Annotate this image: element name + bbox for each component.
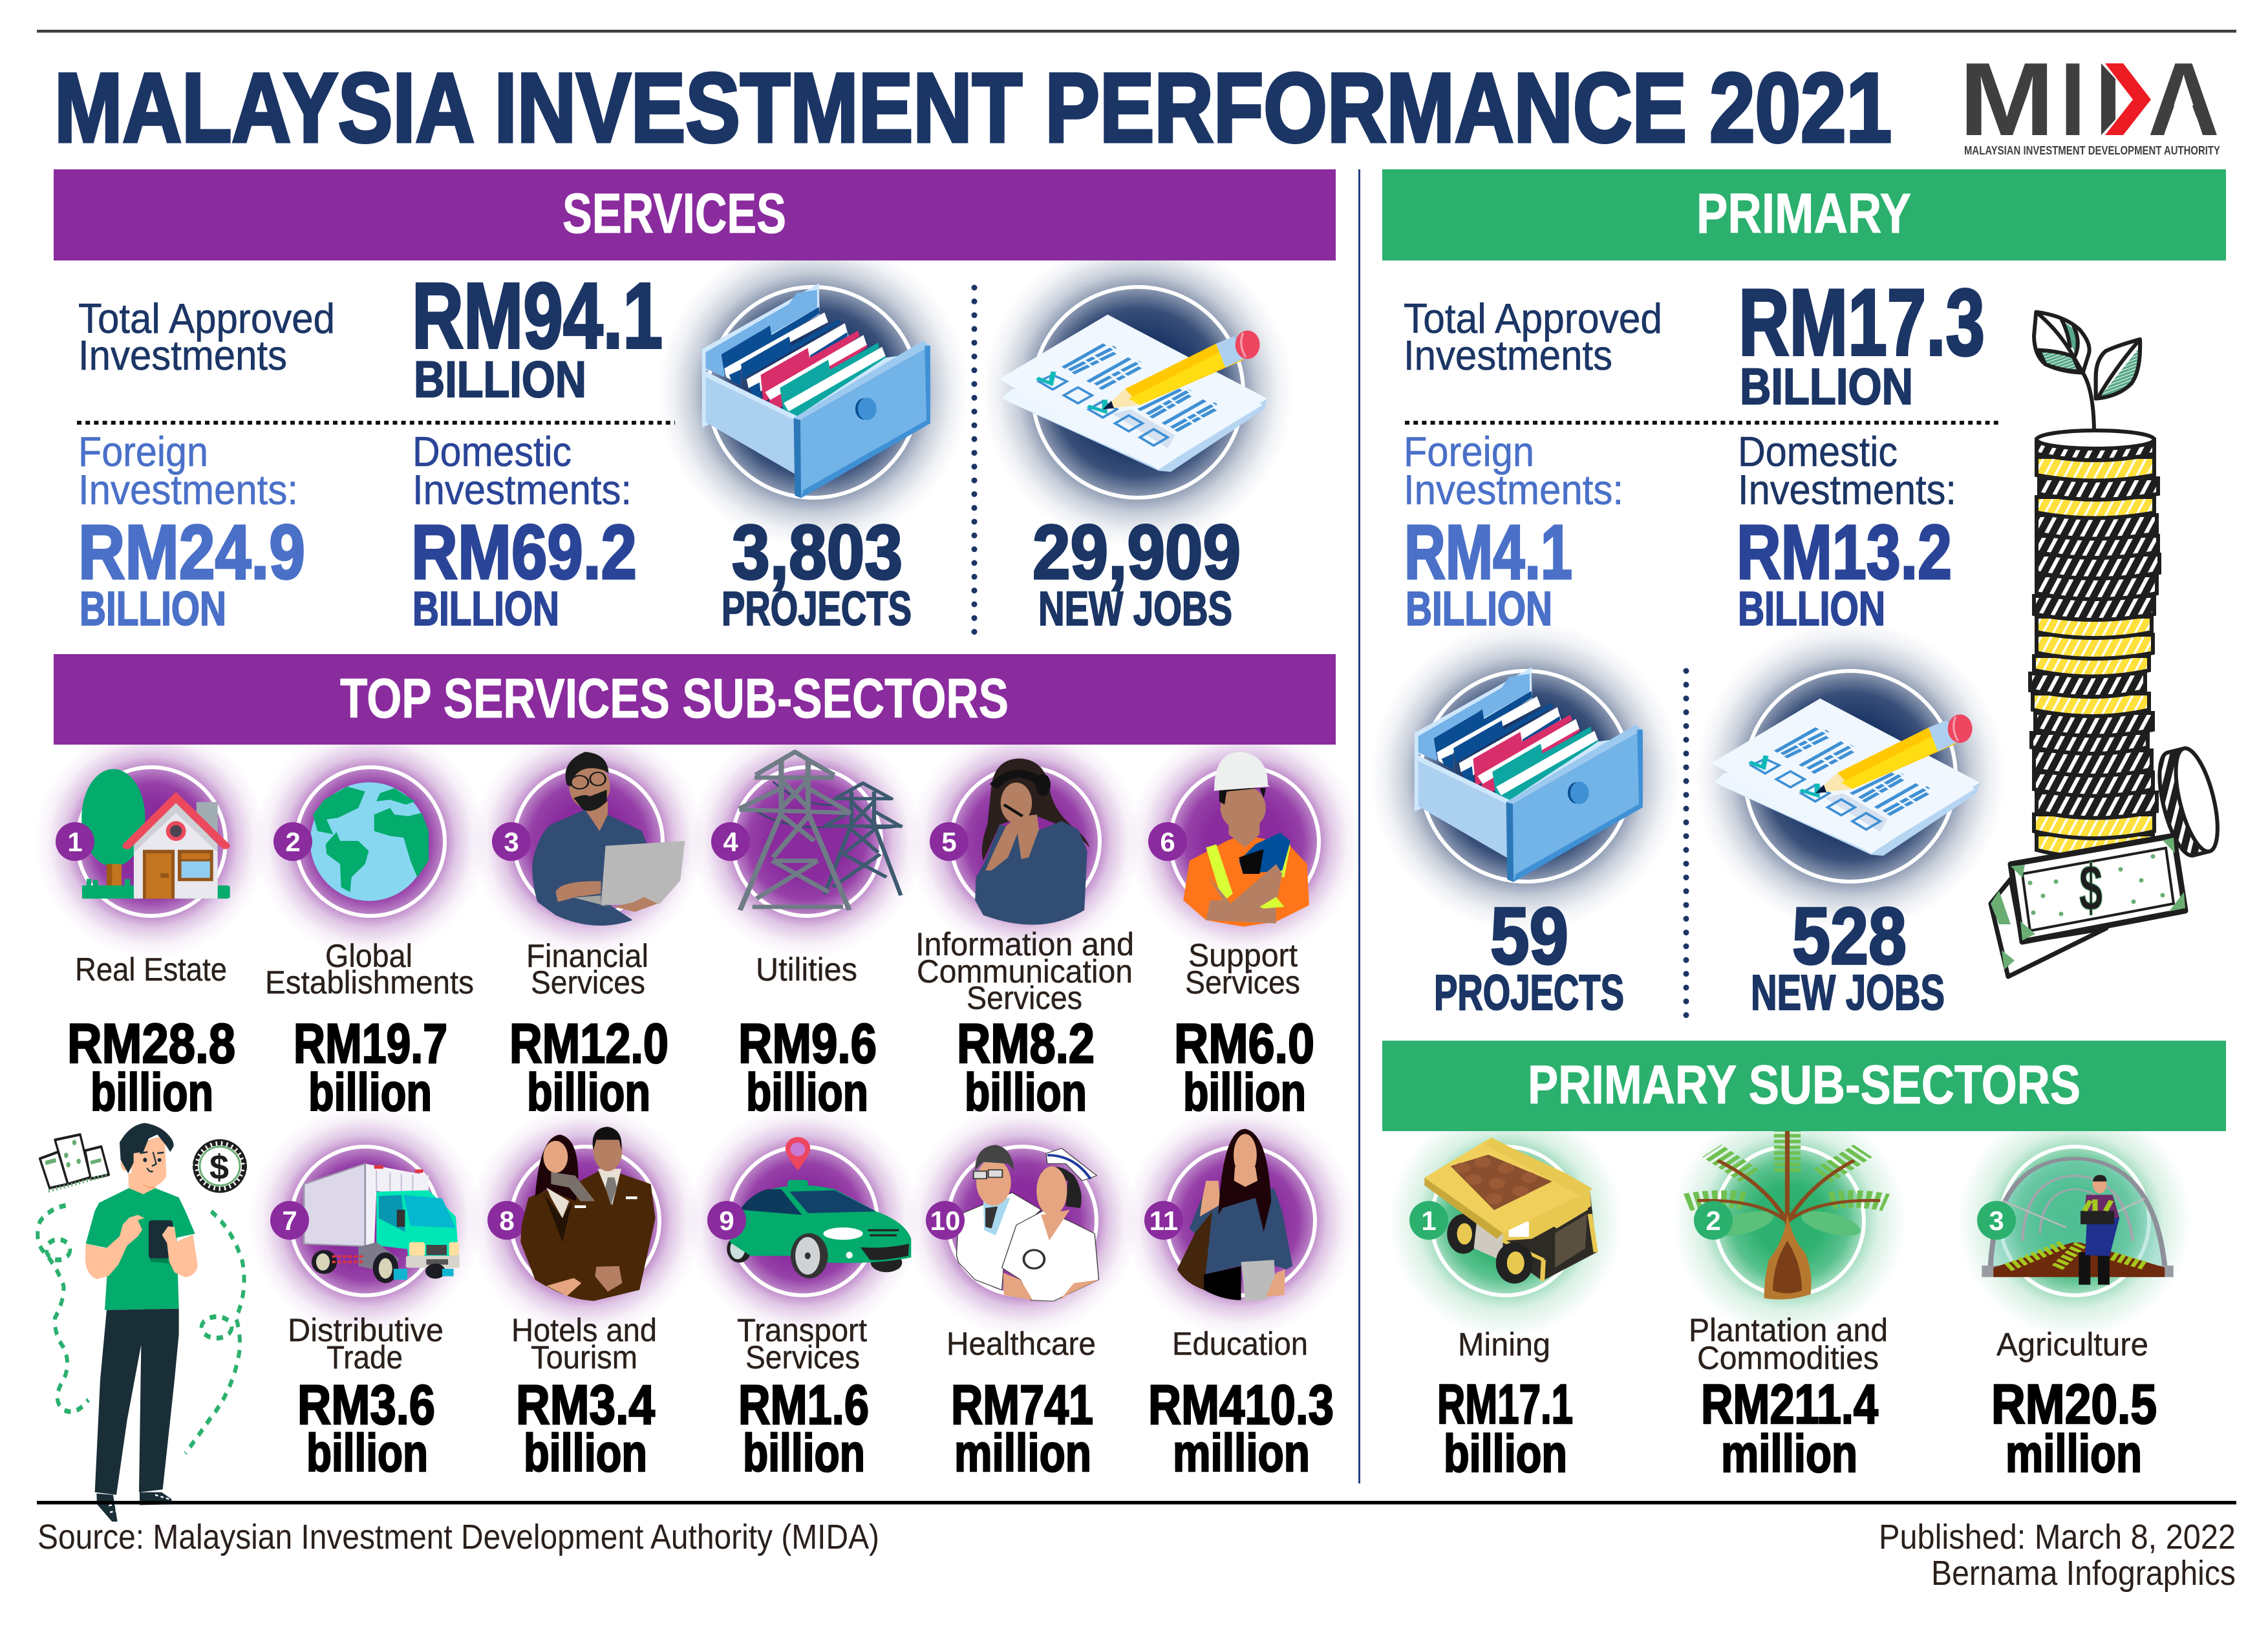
label and value: agriculture: million [2006, 1425, 2142, 1483]
icon: dollar coin [194, 1140, 246, 1192]
badge 6: 6 [1160, 827, 1175, 857]
primary: projects: 59 [1490, 892, 1568, 981]
icon: construction worker [1183, 752, 1309, 927]
label and value: agriculture: Agriculture [1996, 1326, 2148, 1363]
label and value: transport services [737, 1312, 869, 1483]
primary: projects [1434, 892, 1624, 1021]
label and value: hotels and tourism: Hotels and [511, 1312, 657, 1348]
label and value: distributive trade: Trade [326, 1339, 403, 1375]
logo: MIDA: I [2060, 41, 2086, 158]
heading: services: SERVICES [562, 182, 786, 245]
services: total value: RM94.1 [412, 264, 663, 368]
label and value: education: million [1173, 1424, 1310, 1483]
label and value: support services: billion [1183, 1063, 1306, 1122]
sub-sector 10: healthcare [906, 1105, 1139, 1337]
stacked coin bands [2030, 430, 2159, 857]
label and value: plantation and commodities [1689, 1312, 1888, 1483]
badge 9 [707, 1201, 746, 1240]
label and value: healthcare: Healthcare [947, 1326, 1096, 1362]
icon: delivery truck [304, 1163, 460, 1283]
label and value: global establishments: Global [325, 938, 412, 974]
badge 4 [711, 822, 750, 861]
seedling [2034, 312, 2140, 431]
label and value: utilities: RM9.6 [738, 1013, 877, 1075]
badge 9: 9 [719, 1205, 734, 1236]
primary sub-sector 3: agriculture [1958, 1105, 2191, 1337]
label and value: information and communication services [915, 926, 1134, 1122]
buildings [40, 1134, 109, 1188]
label and value: financial services: RM12.0 [509, 1013, 669, 1075]
label and value: global establishments [265, 938, 474, 1122]
primary: projects: PROJECTS [1434, 965, 1624, 1021]
badge 5 [930, 822, 968, 861]
sub-sector 5: information and communication services [909, 725, 1142, 958]
badge 3 [1977, 1201, 2016, 1240]
icon: man with laptop [532, 752, 685, 926]
badge 1 [1409, 1201, 1448, 1240]
label and value: plantation and commodities: Plantation and [1689, 1312, 1888, 1348]
label and value: support services: Services [1185, 964, 1300, 1001]
sub-sector 7: distributive trade [249, 1105, 482, 1337]
heading: primary sub-sectors: PRIMARY SUB-SECTORS [1528, 1054, 2081, 1115]
primary vertical dots [1684, 671, 1689, 1019]
services: total approved label: Investments [78, 332, 287, 379]
label and value: mining: billion [1444, 1425, 1567, 1483]
icon: coin stack with seedling and banknotes [1991, 312, 2226, 977]
sub-sector 6: support services [1128, 725, 1361, 958]
arms [85, 1215, 144, 1279]
label and value: information and communication services: Communication [917, 953, 1133, 990]
label and value: real estate: billion [91, 1063, 213, 1122]
badge 1: 1 [1421, 1205, 1437, 1236]
services: total approved label [78, 295, 335, 379]
services: foreign investments [78, 428, 305, 635]
label and value: support services [1174, 937, 1314, 1122]
label and value: hotels and tourism: Tourism [531, 1339, 637, 1375]
label and value: hotels and tourism: RM3.4 [516, 1374, 655, 1436]
badge 4: 4 [723, 827, 738, 857]
sub-sector 8: hotels and tourism [469, 1105, 701, 1337]
services: new jobs [1032, 509, 1241, 635]
label and value: real estate: Real Estate [75, 951, 227, 988]
badge 11 [1144, 1201, 1183, 1240]
icon: call centre woman [975, 758, 1090, 925]
badge 8: 8 [499, 1205, 515, 1236]
services: total value: BILLION [414, 350, 586, 408]
label and value: global establishments: Establishments [265, 964, 474, 1001]
icon: services checklist [983, 237, 1293, 547]
icon: hotel staff [520, 1127, 656, 1301]
sub-sector 2: global establishments [254, 725, 487, 958]
badge 3 [492, 822, 531, 861]
primary: domestic investments [1737, 428, 1956, 635]
badge 2 [273, 822, 312, 861]
centre divider [1358, 169, 1360, 1483]
sub-sector 9: transport services [687, 1105, 919, 1337]
primary: total approved label: Total Approved [1404, 295, 1662, 342]
services: total value [412, 264, 663, 408]
logo: MIDA: M [1959, 41, 2055, 158]
left dashed path [37, 1205, 244, 1453]
shirt [86, 1188, 195, 1310]
heading: top services sub-sectors [54, 654, 1336, 745]
primary: total value: BILLION [1740, 357, 1913, 415]
badge 3: 3 [1989, 1205, 2004, 1236]
label and value: hotels and tourism [511, 1312, 657, 1483]
primary sub-sector 2: plantation and commodities [1673, 1105, 1906, 1337]
badge 10 [926, 1201, 965, 1240]
bottom rule [37, 1501, 2236, 1505]
label and value: information and communication services: RM8.2 [957, 1013, 1095, 1075]
services: domestic investments: Domestic [412, 428, 572, 475]
heading: top services sub-sectors: TOP SERVICES SUB-SECTORS [340, 668, 1009, 730]
heading: primary sub-sectors [1382, 1041, 2226, 1131]
primary: new jobs: 528 [1792, 892, 1907, 981]
heading: primary [1382, 169, 2226, 260]
icon: services file drawer [658, 237, 968, 547]
primary: domestic investments: RM13.2 [1737, 509, 1952, 595]
label and value: transport services: Transport [737, 1312, 867, 1348]
services: foreign investments: Investments: [78, 466, 298, 513]
services: projects [722, 509, 912, 635]
label and value: education: Education [1172, 1326, 1308, 1362]
services: domestic investments [411, 428, 637, 635]
icon: house [81, 769, 230, 898]
label and value: healthcare [947, 1326, 1096, 1483]
illustration: man with phone [37, 1123, 244, 1522]
label and value: real estate: RM28.8 [67, 1013, 235, 1075]
services: domestic investments: BILLION [412, 582, 559, 635]
badge 5: 5 [941, 827, 957, 857]
icon: woman student [1177, 1129, 1292, 1301]
icon: globe [310, 782, 429, 901]
heading: services [54, 169, 1336, 260]
label and value: mining [1437, 1326, 1573, 1483]
label and value: utilities [738, 951, 877, 1122]
top rule [37, 30, 2236, 32]
label and value: education [1148, 1326, 1334, 1483]
publication note: Published: March 8, 2022 [1879, 1518, 2236, 1556]
badge 7: 7 [282, 1205, 297, 1236]
services: new jobs: 29,909 [1032, 509, 1241, 595]
badge 1: 1 [67, 827, 83, 857]
services dotted divider [77, 421, 675, 425]
primary: foreign investments: Investments: [1404, 466, 1623, 513]
label and value: mining: Mining [1458, 1326, 1550, 1363]
icon: oil palm [1685, 1130, 1886, 1299]
services: domestic investments: RM69.2 [411, 509, 637, 595]
logo: MIDA: MALAYSIAN INVESTMENT DEVELOPMENT AUTHORITY [1964, 144, 2220, 157]
icon: mining truck [1424, 1138, 1597, 1284]
label and value: financial services [509, 938, 669, 1122]
primary: domestic investments: BILLION [1738, 582, 1885, 635]
label and value: transport services: RM1.6 [738, 1374, 869, 1436]
services: domestic investments: Investments: [412, 466, 632, 513]
phone [149, 1257, 177, 1273]
leaning coin [2151, 745, 2226, 860]
label and value: education: RM410.3 [1148, 1374, 1334, 1436]
head [128, 1173, 166, 1194]
primary: foreign investments [1404, 428, 1623, 635]
primary dotted divider [1405, 421, 2002, 425]
label and value: information and communication services: billion [965, 1063, 1087, 1122]
label and value: healthcare: RM741 [951, 1374, 1093, 1436]
primary: foreign investments: RM4.1 [1404, 509, 1572, 595]
badge 2: 2 [285, 827, 301, 857]
primary: foreign investments: BILLION [1406, 582, 1552, 635]
label and value: distributive trade: RM3.6 [297, 1374, 435, 1436]
title: MALAYSIA INVESTMENT PERFORMANCE 2021 [54, 53, 1892, 163]
back banknote [1991, 879, 2106, 977]
services: foreign investments: Foreign [78, 428, 208, 475]
badge 7 [270, 1201, 309, 1240]
badge 8 [487, 1201, 526, 1240]
sub-sector 1: real estate [35, 725, 268, 958]
label and value: support services: RM6.0 [1174, 1013, 1314, 1075]
label and value: healthcare: million [954, 1424, 1091, 1483]
services: new jobs: NEW JOBS [1038, 582, 1232, 635]
label and value: financial services: billion [527, 1063, 650, 1122]
label and value: information and communication services: Information and [915, 926, 1134, 962]
icon: greenhouse farmer [1982, 1158, 2174, 1285]
label and value: agriculture: RM20.5 [1991, 1374, 2157, 1436]
label and value: financial services: Services [531, 964, 645, 1001]
sub-sector 11: education [1124, 1105, 1357, 1337]
services: foreign investments: RM24.9 [78, 509, 305, 595]
badge 2 [1694, 1201, 1733, 1240]
icon: taxi [727, 1137, 911, 1279]
label and value: transport services: Services [745, 1339, 860, 1375]
sub-sector 4: utilities [690, 725, 923, 958]
label and value: plantation and commodities: million [1721, 1425, 1857, 1483]
heading: primary: PRIMARY [1696, 182, 1911, 245]
badge 11: 11 [1150, 1205, 1178, 1236]
badge 3: 3 [504, 827, 519, 857]
primary sub-sector 1: mining [1389, 1105, 1622, 1337]
publication note: Bernama Infographics [1931, 1554, 2236, 1593]
label and value: utilities: Utilities [756, 951, 857, 988]
services: projects: PROJECTS [722, 582, 912, 635]
label and value: distributive trade: Distributive [288, 1312, 444, 1348]
front banknote [2011, 836, 2185, 942]
badge 2: 2 [1706, 1205, 1721, 1236]
label and value: distributive trade: billion [306, 1424, 428, 1483]
primary: new jobs: NEW JOBS [1751, 965, 1945, 1021]
label and value: distributive trade [288, 1312, 444, 1483]
icon: doctor and nurse [956, 1145, 1099, 1301]
icon: coin stack with seedling and banknotes: $ [2079, 852, 2102, 924]
label and value: plantation and commodities: RM211.4 [1701, 1374, 1878, 1436]
label and value: agriculture [1991, 1326, 2157, 1483]
label and value: financial services: Financial [526, 938, 648, 974]
sub-sector 3: financial services [472, 725, 705, 958]
services vertical dots [971, 288, 978, 633]
source note: Source: Malaysian Investment Development Authority (MIDA) [37, 1518, 879, 1556]
logo: MIDA: A [2148, 41, 2220, 158]
primary: foreign investments: Foreign [1404, 428, 1534, 475]
badge 10: 10 [930, 1205, 960, 1236]
label and value: information and communication services: Services [967, 980, 1082, 1016]
badge 1 [56, 822, 94, 861]
icon: primary checklist [1695, 621, 2006, 931]
label and value: support services: Support [1188, 937, 1298, 973]
label and value: transport services: billion [743, 1424, 865, 1483]
label and value: hotels and tourism: billion [524, 1424, 647, 1483]
label and value: real estate [67, 951, 235, 1122]
label and value: plantation and commodities: Commodities [1697, 1340, 1879, 1376]
primary: domestic investments: Investments: [1738, 466, 1956, 513]
label and value: mining: RM17.1 [1437, 1374, 1573, 1436]
primary: domestic investments: Domestic [1738, 428, 1898, 475]
label and value: global establishments: billion [308, 1063, 432, 1122]
label and value: global establishments: RM19.7 [294, 1013, 447, 1075]
label and value: utilities: billion [746, 1063, 868, 1122]
services: total approved label: Total Approved [78, 295, 335, 342]
publication note [1879, 1518, 2236, 1593]
services: projects: 3,803 [732, 509, 903, 595]
logo: MIDA [1959, 41, 2220, 158]
primary: total value: RM17.3 [1738, 270, 1985, 375]
badge 6 [1148, 822, 1187, 861]
services: foreign investments: BILLION [80, 582, 226, 635]
primary: total value [1738, 270, 1985, 415]
icon: primary file drawer [1371, 621, 1681, 931]
pants and shoes [95, 1309, 179, 1495]
icon: dollar coin: $ [209, 1148, 229, 1187]
icon: pylons [739, 752, 902, 910]
primary: total approved label: Investments [1404, 332, 1612, 379]
primary: new jobs [1751, 892, 1945, 1021]
primary: total approved label [1404, 295, 1662, 379]
